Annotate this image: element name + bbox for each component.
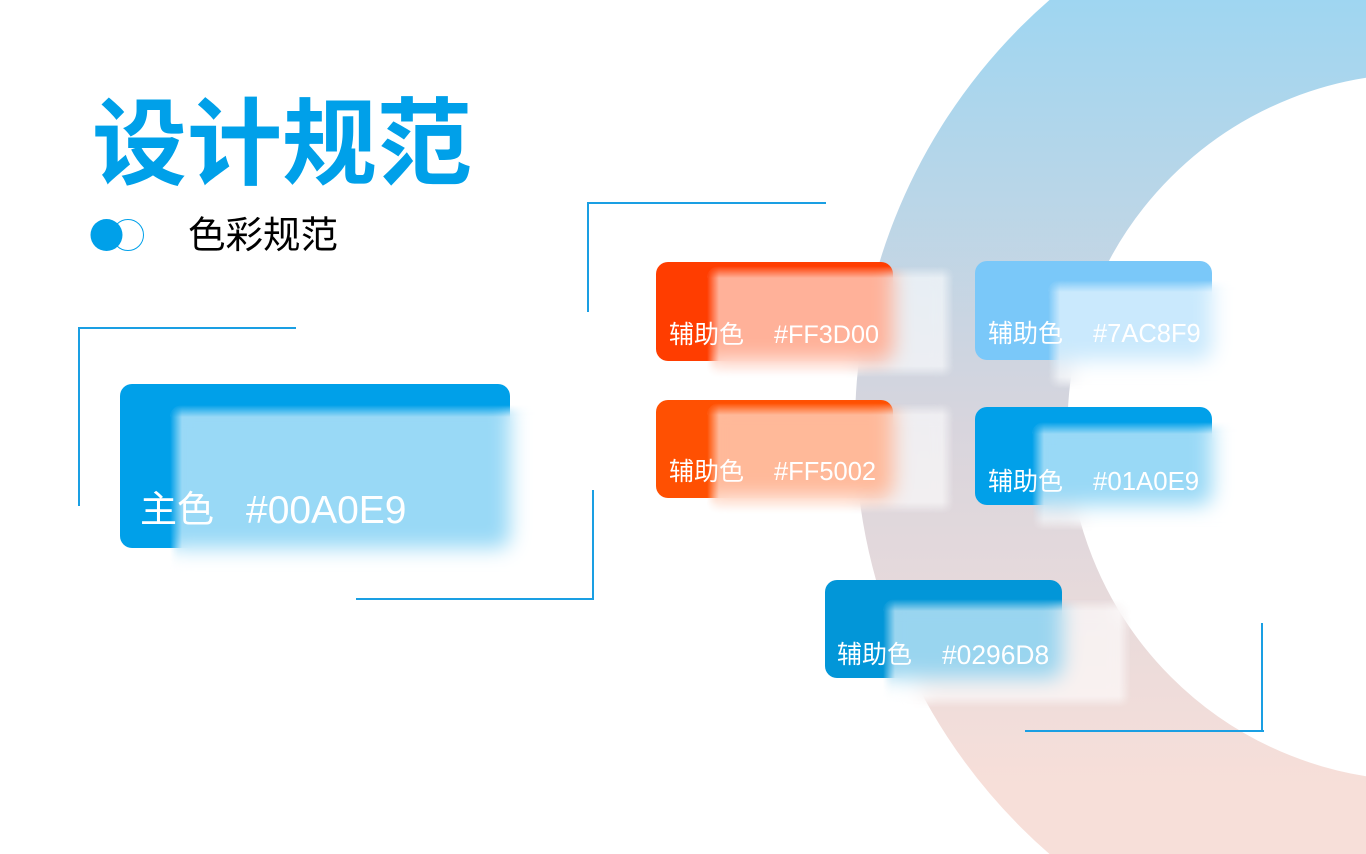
panel: secondary colour #0296D8: #0296D8 — [942, 640, 1049, 670]
panel: secondary colour #01A0E9 — [975, 407, 1226, 528]
title: 设计规范 — [92, 92, 472, 198]
panel: main colour #00A0E9 — [120, 384, 524, 562]
panel: secondary colour #FF5002: 辅助色 — [669, 458, 744, 486]
panel: secondary colour #FF5002: #FF5002 — [774, 458, 876, 486]
panel: secondary colour #7AC8F9: #7AC8F9 — [1093, 320, 1201, 348]
panel: secondary colour #FF5002 — [656, 400, 950, 510]
panel: secondary colour #01A0E9: 辅助色 — [988, 468, 1063, 496]
panel: secondary colour #7AC8F9 — [975, 261, 1222, 386]
panel: secondary colour #0296D8 — [825, 580, 1126, 704]
panel: secondary colour #FF3D00 — [656, 262, 951, 376]
panel: secondary colour #01A0E9: #01A0E9 — [1093, 468, 1199, 496]
subtitle: 色彩规范 — [188, 214, 338, 256]
panel: secondary colour #7AC8F9: 辅助色 — [988, 320, 1063, 348]
panel: secondary colour #0296D8: 辅助色 — [837, 641, 912, 669]
corner bracket: main colour bottom-right — [356, 490, 594, 600]
panel: secondary colour #FF3D00: #FF3D00 — [774, 321, 879, 349]
corner bracket: main colour top-left — [78, 327, 296, 506]
panel: main colour #00A0E9: #00A0E9 — [246, 489, 406, 532]
corner bracket: secondary colours top-left — [587, 202, 826, 312]
panel: secondary colour #FF3D00: 辅助色 — [669, 321, 744, 349]
icon: two overlapping circles — [90, 219, 144, 251]
panel: main colour #00A0E9: 主色 — [140, 489, 214, 530]
corner bracket: secondary colours bottom-right — [1025, 623, 1264, 732]
